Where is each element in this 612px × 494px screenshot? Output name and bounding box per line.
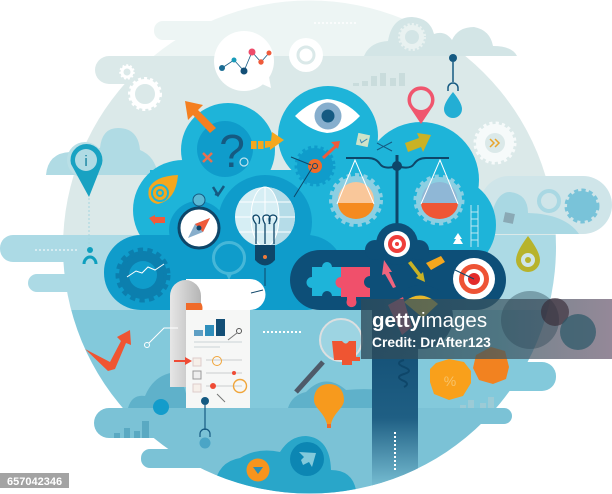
small red arrow bbox=[149, 215, 165, 225]
red check arrow bbox=[85, 330, 131, 371]
target top bbox=[384, 231, 410, 257]
compass bbox=[179, 194, 219, 248]
white gear bubble bbox=[289, 38, 323, 72]
target right bbox=[453, 258, 495, 300]
blue dot bbox=[153, 399, 169, 415]
eye bbox=[295, 99, 360, 133]
cloud: top right pale with gear bbox=[364, 17, 517, 56]
balloon bbox=[314, 384, 344, 428]
bottom circles bbox=[246, 442, 324, 482]
globe and bulb bbox=[235, 187, 295, 286]
ring with tail bbox=[214, 242, 244, 280]
gear with line chart bbox=[119, 251, 167, 299]
cloud: lower left bbox=[128, 372, 190, 408]
arrows in dark pill bbox=[382, 256, 445, 288]
small white tree arrow bbox=[453, 233, 463, 244]
gold arrow bbox=[405, 133, 431, 152]
faint bar chart bbox=[353, 73, 405, 86]
left white arrow line bbox=[144, 328, 178, 348]
olive drop bbox=[516, 236, 540, 272]
small check card bbox=[356, 133, 370, 147]
main cloud bbox=[133, 86, 496, 280]
question circle bbox=[197, 121, 253, 177]
cloud: bottom bbox=[213, 436, 356, 494]
map pin red bbox=[408, 86, 434, 124]
drop amber bbox=[148, 175, 178, 204]
central pie circle bbox=[388, 285, 453, 349]
ladder bbox=[471, 205, 478, 247]
puzzle pieces bbox=[307, 262, 370, 307]
cloud: lower mid bbox=[288, 381, 416, 408]
dashed white line top bbox=[314, 22, 358, 24]
left info pin: i bbox=[84, 153, 88, 170]
speech bubble chart bbox=[214, 31, 274, 91]
left info pin bbox=[67, 142, 103, 264]
orange arrow top bbox=[185, 101, 216, 133]
dark pill bbox=[290, 223, 506, 310]
hanging drop bbox=[444, 54, 462, 118]
magnifier bbox=[296, 319, 362, 392]
dotted arrows bbox=[263, 331, 303, 333]
image id tag: 657042346 bbox=[7, 476, 62, 488]
white gear chevrons bbox=[476, 124, 514, 162]
watermark band: Credit: DrAfter123 bbox=[372, 335, 491, 350]
faint bar chart right bbox=[460, 397, 494, 408]
blue gear with orange centre bbox=[291, 141, 340, 197]
percent blob bbox=[430, 359, 471, 400]
amber dashed arrow bbox=[251, 132, 284, 150]
balance scale bbox=[337, 155, 458, 230]
small scissors cross bbox=[377, 142, 392, 151]
image id tag bbox=[0, 473, 69, 488]
hook lower bbox=[200, 397, 210, 448]
scroll bbox=[170, 279, 266, 408]
percent blob: % bbox=[444, 373, 456, 389]
scale gears bbox=[332, 176, 462, 224]
cloud: left info bbox=[46, 128, 158, 175]
darker lower cloud bbox=[104, 175, 344, 310]
white gears left bbox=[120, 65, 160, 110]
small dark check arrow bbox=[213, 186, 224, 195]
watermark band: gettyimages bbox=[372, 309, 487, 332]
question circle: ? bbox=[219, 125, 245, 177]
dark stem bbox=[372, 310, 418, 490]
lower left bar chart bbox=[114, 421, 149, 438]
cloud: right bbox=[489, 192, 579, 234]
orange gear bbox=[473, 347, 509, 384]
right gears bbox=[503, 191, 597, 224]
watermark band bbox=[361, 291, 612, 359]
